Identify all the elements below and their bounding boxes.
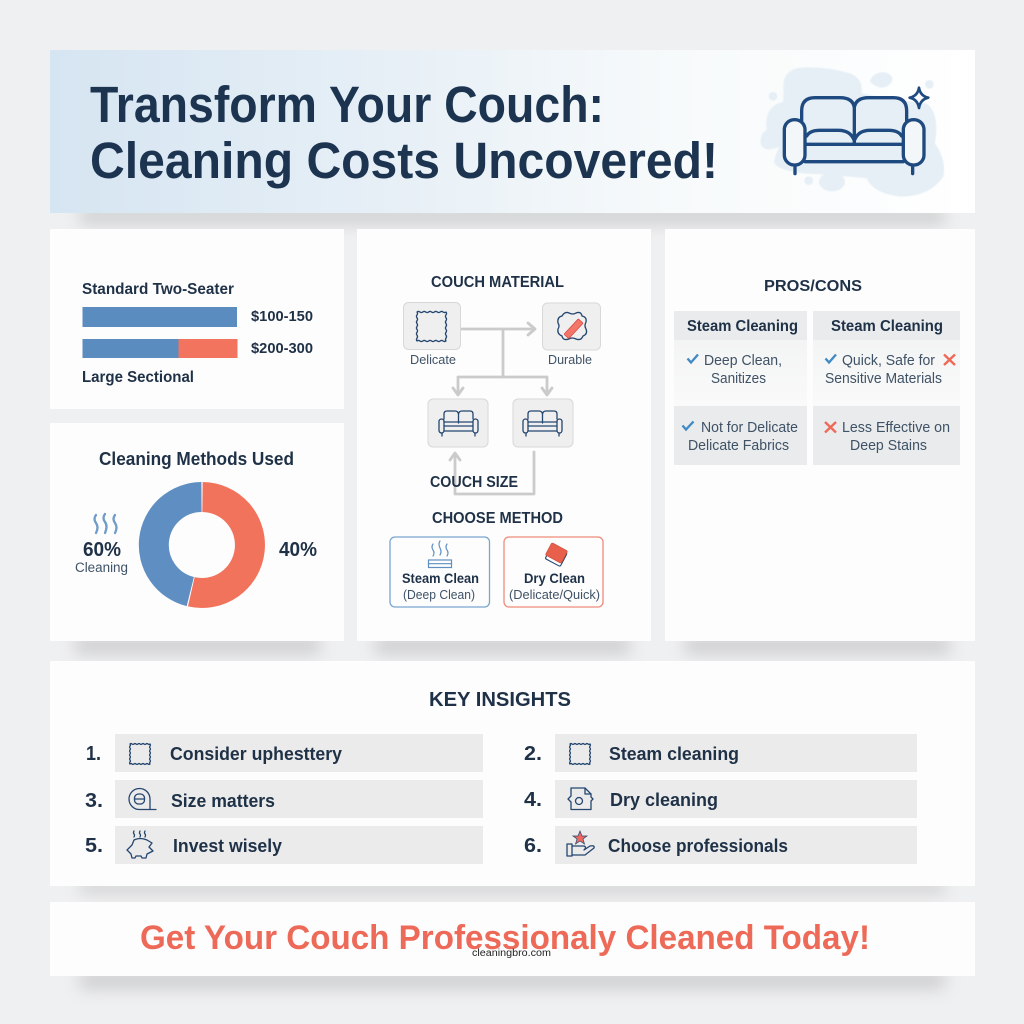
insight 3: 3. [85,790,103,812]
column 2: steam cleaning: Less Effective on [842,420,950,436]
heading: couch material: COUCH MATERIAL [431,274,564,291]
bar: large sectional [82,339,238,358]
column 1: steam cleaning: Not for Delicate [701,420,798,436]
call to action text: Get Your Couch Professionaly Cleaned Today! [140,919,870,957]
heading: choose method: CHOOSE METHOD [432,510,563,527]
heading: KEY INSIGHTS [429,689,571,711]
column 1: steam cleaning: Sanitizes [711,371,766,387]
value: 60%: 60% [83,539,121,561]
option: steam clean: Steam Clean [402,570,479,586]
option: steam clean [390,537,490,607]
panel: key insights [50,661,975,886]
icon: couch with sparkle [761,67,944,197]
column 2: steam cleaning: Sensitive Materials [825,371,942,387]
insight 3 [85,780,483,818]
panel: call to action [50,902,975,976]
node: durable [542,303,600,367]
column 1: steam cleaning: Deep Clean, [704,353,782,369]
heading: Cleaning Methods Used [99,449,294,469]
option: dry clean: Dry Clean [524,570,585,586]
option: dry clean [504,537,603,607]
insight 5 [85,826,483,864]
insight 4: 4. [524,789,542,811]
insight 2: Steam cleaning [609,743,739,764]
insight 3: Size matters [171,790,275,811]
node: durable: Durable [548,352,592,367]
panel: decision flowchart [357,229,651,641]
bar: standard two-seater [82,307,237,327]
price: $100-150: $100-150 [251,308,313,325]
panel: couch size pricing [50,229,344,409]
label: cleaning: Cleaning [75,560,128,575]
heading: couch size: COUCH SIZE [430,474,518,491]
source credit: cleaningbro.com [472,948,551,959]
price: $200-300: $200-300 [251,340,313,357]
insight 1 [86,734,483,772]
insight 6: 6. [524,835,542,857]
column 2: steam cleaning: Deep Stains [850,438,927,454]
insight 1: 1. [86,743,101,765]
title [90,76,718,189]
node: delicate: Delicate [410,352,456,367]
panel: cleaning methods donut [50,423,344,641]
insight 1: Consider uphesttery [170,743,343,764]
option: dry clean: (Delicate/Quick) [509,587,600,602]
column 2: steam cleaning: Quick, Safe for [842,353,935,369]
panel shadows [75,208,950,989]
title: Cleaning Costs Uncovered! [90,132,718,189]
node: delicate [404,302,460,367]
column 2: steam cleaning: Steam Cleaning [831,318,943,335]
node: couch size large [513,399,573,447]
insight 2: 2. [524,743,542,765]
icon: steam [94,514,116,533]
panel: pros and cons [665,229,975,641]
insight 2 [524,734,917,772]
insight 5: Invest wisely [173,835,283,856]
insight 5: 5. [85,835,103,857]
donut chart [154,497,250,593]
column 1: steam cleaning: Steam Cleaning [687,318,798,335]
header banner [50,50,975,213]
value: 40%: 40% [279,539,317,561]
column 2: steam cleaning [813,311,960,465]
insight 4 [524,780,917,818]
column 1: steam cleaning [674,311,807,465]
option: steam clean: (Deep Clean) [403,587,475,602]
insight 4: Dry cleaning [610,789,718,810]
node: couch size small [428,399,488,447]
label: large sectional: Large Sectional [82,369,194,386]
title: Transform Your Couch: [90,76,604,133]
insight 6 [524,826,917,864]
insight 6: Choose professionals [608,835,788,856]
heading: PROS/CONS [764,278,862,295]
label: standard two-seater: Standard Two-Seater [82,281,234,298]
flow arrows [450,323,552,494]
column 1: steam cleaning: Delicate Fabrics [688,438,789,454]
